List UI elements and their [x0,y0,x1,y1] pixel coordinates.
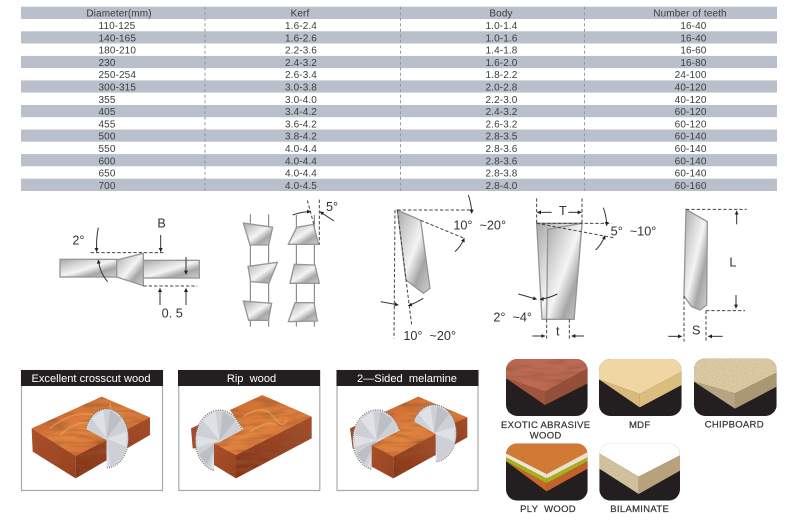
diagram: tooth length L and S [668,209,747,342]
column: number of teeth [653,8,727,192]
column: kerf: 2.2-3.6 [285,46,317,57]
diagram: tooth taper T and t: 5° ~10° [611,225,656,239]
column: diameter: 110-125 [98,21,136,32]
column: body: 2.0-2.8 [486,82,518,94]
illustration: wood block with blade [32,397,150,478]
label: exotic abrasive wood: EXOTIC ABRASIVE [501,420,590,431]
diagram: blade side profile with tooth: B [157,216,166,230]
column: diameter: 250-254 [98,70,136,81]
column: kerf [285,8,317,192]
column: number of teeth: 40-120 [675,95,707,106]
diagram: alternating tooth top view [243,200,338,327]
column: number of teeth: 60-120 [675,119,707,130]
label: chipboard: CHIPBOARD [705,420,764,430]
column: number of teeth: 60-140 [675,169,707,180]
column: body: 2.6-3.2 [486,119,518,130]
column: body: 1.4-1.8 [486,46,518,57]
heading: crosscut: Excellent crosscut wood [31,373,151,385]
panel: rip wood [178,370,320,490]
column: kerf: 4.0-4.4 [285,156,317,167]
column: kerf: 4.0-4.5 [285,181,317,192]
diagram: blade side profile with tooth [60,216,199,320]
column: number of teeth: 40-120 [675,82,707,94]
column: body: 1.0-1.4 [486,21,518,32]
column: diameter: 405 [98,107,116,118]
column: diameter: 700 [98,181,116,192]
column: kerf: 2.4-3.2 [285,58,317,69]
specification table [21,7,777,192]
heading: rip: Rip wood [227,373,276,385]
material: bilaminate [599,443,680,515]
column: body: 1.0-1.6 [486,33,518,44]
column: diameter: 180-210 [98,46,136,57]
column: body: 2.8-3.8 [486,169,518,180]
diagram: tooth taper T and t: T [559,204,567,218]
column: kerf: 3.4-4.2 [285,107,317,118]
diagram: blade side profile with tooth: 2° [72,233,84,247]
diagram: tooth angle front [381,195,506,343]
diagram: tooth length L and S: L [729,255,736,269]
column: diameter: 230 [98,58,116,69]
column: number of teeth: 60-140 [675,156,707,167]
column: kerf: 3.6-4.2 [285,119,317,130]
material: exotic abrasive wood [501,359,590,442]
diagram: tooth length L and S: S [692,323,700,337]
column: diameter: 355 [98,95,116,106]
column: diameter: 455 [98,119,116,130]
column: diameter: 600 [98,156,116,167]
column: body: 1.6-2.0 [486,58,518,69]
heading: melamine: 2—Sided melamine [357,373,457,385]
label: exotic abrasive wood: WOOD [530,431,562,442]
column: number of teeth: 24-100 [675,70,707,81]
column: diameter: 300-315 [98,82,136,94]
column: body: 2.2-3.0 [486,95,518,106]
column: body: 2.4-3.2 [486,107,518,118]
illustration: wood block with blade from left [191,395,312,478]
column: body: 2.8-3.6 [486,156,518,167]
diagram: tooth angle front: 10° ~20° [453,218,506,232]
diagram: blade side profile with tooth: 0. 5 [162,306,183,320]
column: number of teeth: 60-120 [675,107,707,118]
column: kerf: Kerf [291,8,310,20]
column: kerf: 3.0-3.8 [285,82,317,94]
label: MDF: MDF [629,420,650,431]
column: number of teeth: 60-140 [675,144,707,155]
column: number of teeth: 16-40 [680,33,707,44]
column: diameter: 500 [98,132,116,143]
diagram: tooth taper T and t: 2° ~4° [493,311,532,325]
column: number of teeth: 60-160 [675,181,707,192]
column: body: 2.8-3.5 [486,132,518,143]
table row bands [21,7,777,191]
column: body: Body [489,8,513,20]
panel: excellent crosscut wood [21,370,163,490]
column: number of teeth: Number of teeth [653,8,727,20]
column: diameter: 550 [98,144,116,155]
material: ply wood [506,443,588,515]
column: number of teeth: 16-80 [680,58,707,69]
label: bilaminate: BILAMINATE [610,504,669,515]
column: number of teeth: 16-60 [680,46,707,57]
column: kerf: 4.0-4.4 [285,144,317,155]
column: body: 2.8-3.6 [486,144,518,155]
column: diameter: 140-165 [98,33,136,44]
column: kerf: 4.0-4.4 [285,169,317,180]
column: body [486,8,518,192]
column: kerf: 1.6-2.4 [285,21,317,32]
column: kerf: 3.0-4.0 [285,95,317,106]
column: diameter: 650 [98,169,116,180]
column: diameter: Diameter(mm) [86,8,152,20]
column: number of teeth: 16-40 [680,21,707,32]
material: MDF [599,359,682,431]
column: diameter [86,8,152,192]
diagram: alternating tooth top view: 5° [326,200,338,214]
material: chipboard [694,358,777,430]
panel: 2-sided melamine [336,370,478,490]
diagram: tooth taper T and t: t [556,325,560,339]
column: kerf: 1.6-2.6 [285,33,317,44]
label: ply wood: PLY WOOD [520,504,576,515]
column: number of teeth: 60-140 [675,132,707,143]
column: kerf: 2.6-3.4 [285,70,317,81]
diagram: tooth angle front: 10° ~20° [403,329,456,343]
column: kerf: 3.8-4.2 [285,132,317,143]
diagram: tooth taper T and t [493,198,656,339]
column: body: 2.8-4.0 [486,181,518,192]
column: body: 1.8-2.2 [486,70,518,81]
illustration: wood block with two blades [350,397,467,478]
